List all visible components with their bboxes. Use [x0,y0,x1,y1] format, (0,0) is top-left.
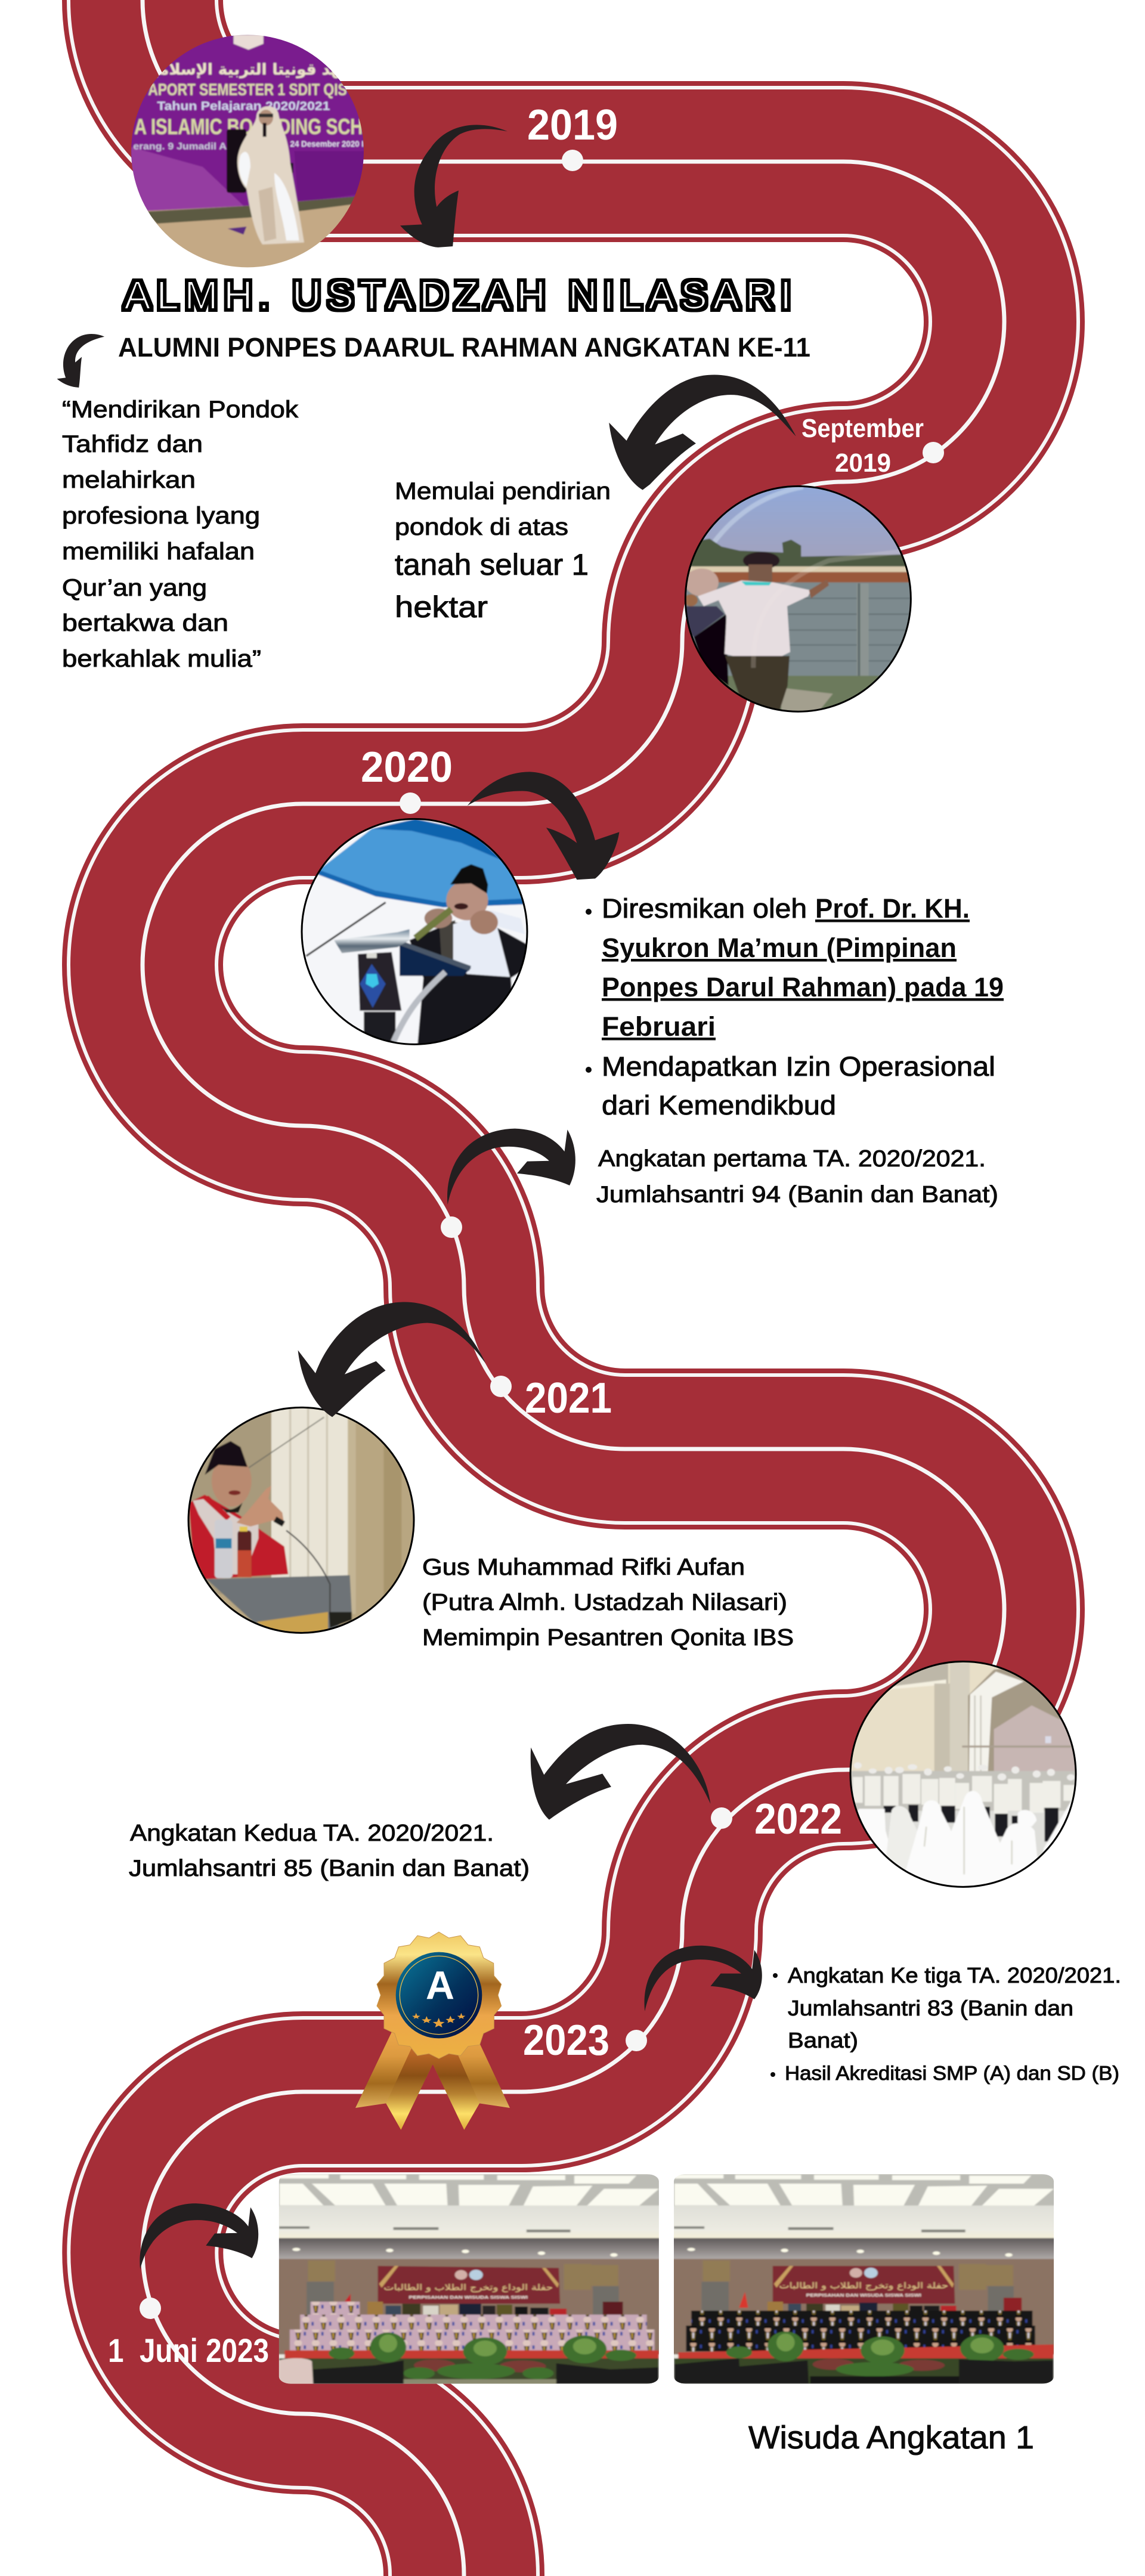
text: inauguration list: Diresmikan oleh [602,893,807,924]
text: second cohort: Jumlahsantri 85 (Banin dan Banat) [129,1856,530,1881]
text: new leader: Memimpin Pesantren Qonita IBS [422,1625,794,1651]
text: inauguration list [586,893,1004,1120]
2019 marker: 2019 [527,101,618,149]
subtitle: ALUMNI PONPES DAARUL RAHMAN ANGKATAN KE-11 [118,332,810,363]
award badge: accreditation A [355,1932,510,2130]
photo: students in white, circular [849,1660,1077,1888]
quote text: profesiona lyang [62,503,260,529]
text: new leader: Gus Muhammad Rifki Aufan [422,1555,745,1580]
text: inauguration list: Syukron Ma’mun (Pimpinan [602,933,957,963]
photo: graduation group boys: PERPISAHAN DAN WISUDA SISWA SISWI [806,2292,921,2298]
photo: graduation group boys [669,2165,1062,2387]
photo: speaker at podium, circular [301,818,528,1045]
September 2019 marker: 2019 [835,448,891,478]
text: start of construction: hektar [395,590,488,624]
arrow: 2023 to third cohort [645,1946,762,2011]
2022 marker [711,1795,842,1843]
arrow: small to quote [57,334,104,388]
1 Juni 2023 marker: 1 Juni 2023 [108,2332,269,2369]
arrow: 1 Juni 2023 to photos [140,2203,258,2269]
quote text: Qur’an yang [62,575,207,601]
mid 2020 marker [441,1216,462,1238]
photo: stage speech, circular: 24 Desember 2020 I [290,139,364,148]
text: third cohort and accreditation: Banat) [788,2028,858,2052]
text: second cohort: Angkatan Kedua TA. 2020/2021. [130,1820,494,1846]
photo: stage speech, circular: APORT SEMESTER 1 SDIT QIS [148,80,347,98]
text: inauguration list: dari Kemendikbud [602,1090,836,1120]
text: second cohort [129,1820,530,1881]
arrow: 2021 to portrait [298,1302,485,1417]
text: start of construction: Memulai pendirian [395,478,611,504]
photo: stage speech, circular: A ISLAMIC BOARDING SCH [134,114,363,139]
September 2019 marker [802,414,944,478]
photo: stage speech, circular: معهد قونيتا التربية الإسلامية [144,61,359,79]
text: inauguration list: Februari [602,1011,716,1042]
arrows group three [140,1724,762,2269]
text: new leader: (Putra Almh. Ustadzah Nilasari) [422,1590,787,1615]
arrow: September 2019 [609,374,796,490]
text: start of construction: tanah seluar 1 [395,548,589,581]
text: third cohort and accreditation: Hasil Akreditasi SMP (A) dan SD (B) [785,2062,1119,2084]
text: inauguration list: Ponpes Darul Rahman) pada 19 [602,972,1004,1002]
stars [412,2013,465,2027]
text: start of construction: pondok di atas [395,514,568,540]
text: start of construction [395,478,611,624]
photo: stage speech, circular [131,35,364,267]
photo: graduation group girls: حفلة الوداع وتخرج الطلاب و الطالبات [383,2283,553,2293]
2020 marker: 2020 [361,744,453,791]
arrow: to first cohort [447,1129,575,1205]
year dots and labels [108,101,944,2369]
photo: land survey at wall, circular [685,485,912,713]
text: third cohort and accreditation [770,1963,1121,2084]
2022 marker: 2022 [754,1795,842,1843]
text: inauguration list: Mendapatkan Izin Operasional [602,1051,995,1082]
September 2019 marker: September [802,414,924,443]
winding road timeline [143,0,1004,2576]
text: first cohort: Jumlahsantri 94 (Banin dan Banat) [596,1182,998,1208]
2023 marker: 2023 [523,2017,609,2064]
gold seal [377,1932,502,2058]
2020 marker [361,744,453,814]
quote text: Tahfidz dan [62,431,203,457]
arrows group one [57,125,796,880]
quote text: bertakwa dan [62,610,228,636]
2021 marker [490,1374,612,1422]
photo: graduation group girls: PERPISAHAN DAN WISUDA SISWA SISWI [409,2295,528,2300]
quote text: “Mendirikan Pondok [62,397,299,423]
1 Juni 2023 marker [108,2298,269,2369]
text: new leader [422,1555,794,1651]
quote text: melahirkan [62,467,196,493]
text: first cohort: Angkatan pertama TA. 2020/2021. [598,1146,986,1172]
photo: stage speech, circular: erang. 9 Jumadil A [133,142,227,152]
quote text: berkahlak mulia” [62,646,261,672]
arrows group two [298,1129,575,1417]
2021 marker: 2021 [525,1374,612,1422]
arrow: 2019 to portrait [400,125,507,247]
photo: Gus Muhammad Rifki Aufan speaking, circular [187,1406,415,1634]
photo: graduation group girls [274,2165,667,2387]
text: third cohort and accreditation: Angkatan Ke tiga TA. 2020/2021. [788,1963,1121,1987]
2019 marker [527,101,618,171]
quote text [62,397,299,672]
title: ALMH. USTADZAH NILASARI [124,273,791,318]
letter grade: A [426,1964,454,2008]
navy disc [396,1952,482,2038]
photo: stage speech, circular: Tahun Pelajaran 2020/2021 [157,99,330,113]
quote text: memiliki hafalan [62,538,255,565]
caption: graduation: Wisuda Angkatan 1 [748,2420,1034,2456]
photo: graduation group boys: حفلة الوداع وتخرج الطلاب و الطالبات [779,2280,948,2291]
text: first cohort [596,1146,998,1208]
arrow: 2020 to list [468,772,619,880]
arrow: 2022 to second cohort [531,1724,710,1820]
text: inauguration list: Prof. Dr. KH. [815,893,970,924]
text: third cohort and accreditation: Jumlahsantri 83 (Banin dan [788,1996,1073,2020]
ribbon tails [355,2032,510,2130]
